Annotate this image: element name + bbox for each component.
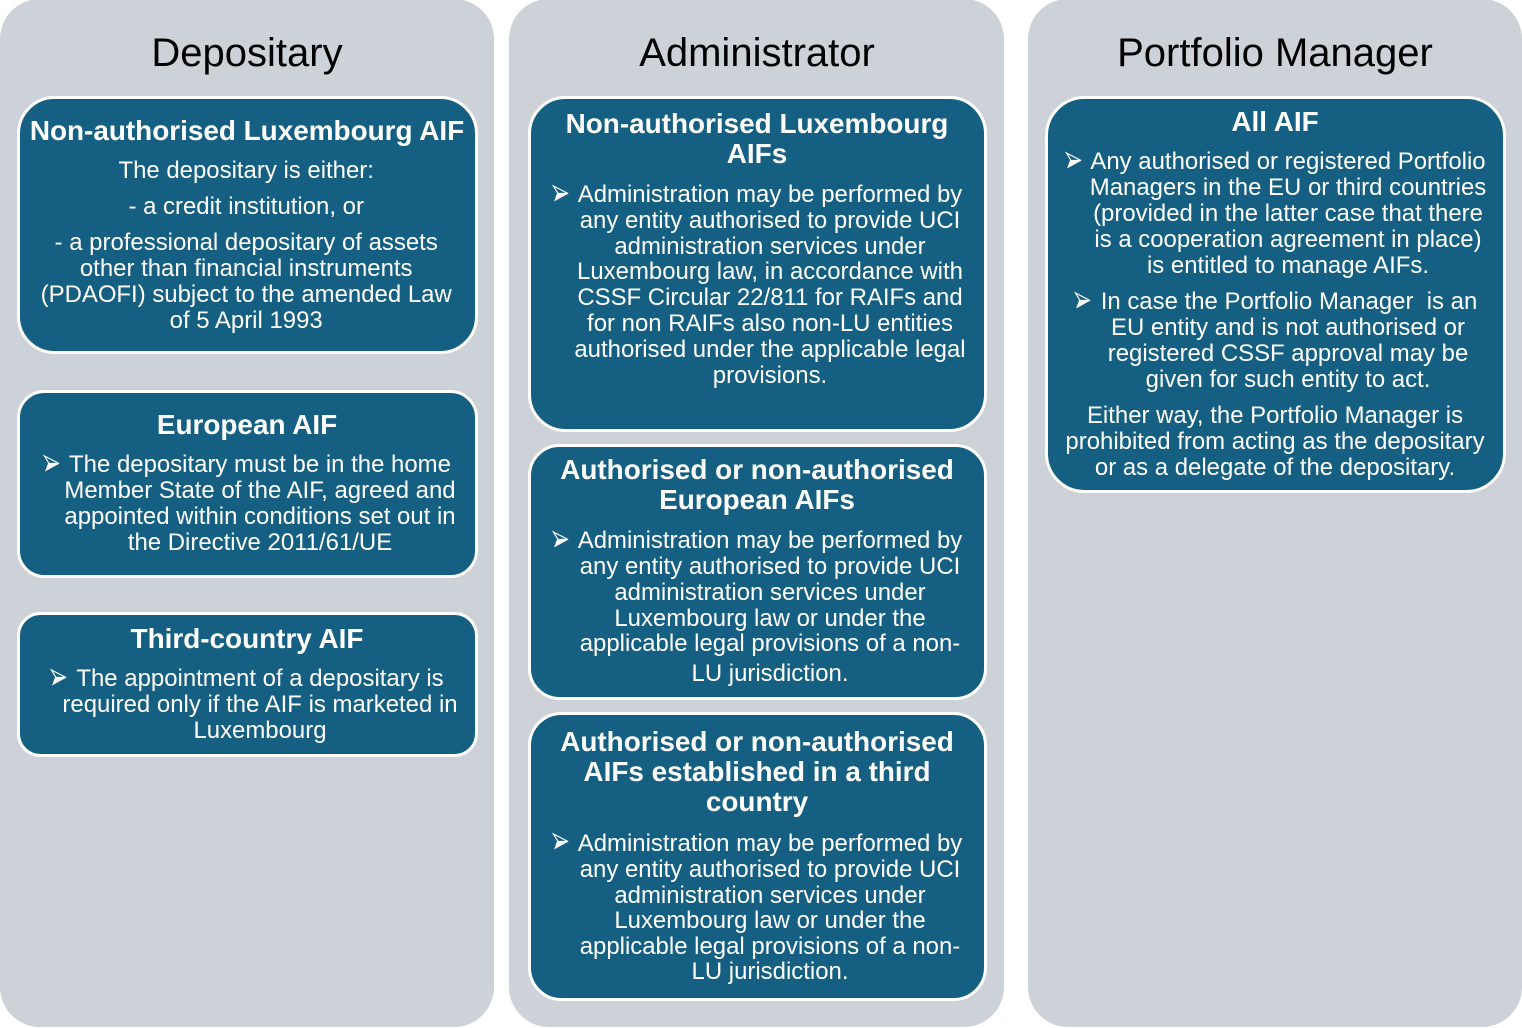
card: Non-authorised Luxembourg AIFs: provisions. — [713, 362, 827, 389]
card: Authorised or non-authorised AIFs established in a third country: administration services under — [614, 882, 926, 909]
card: Authorised or non-authorised European AIFs: Authorised or non-authorised — [560, 454, 954, 485]
icon: arrow bullet — [1066, 153, 1082, 168]
card: Non-authorised Luxembourg AIFs: Administration may be performed by — [578, 181, 962, 208]
card: All AIF: is a cooperation agreement in place) — [1094, 226, 1482, 253]
heading: Depositary: Depositary — [151, 31, 343, 75]
card: Non-authorised Luxembourg AIF: Non-authorised Luxembourg AIF — [30, 115, 464, 146]
card: Authorised or non-authorised European AIFs: European AIFs — [659, 484, 855, 515]
card: Authorised or non-authorised AIFs established in a third country: LU jurisdiction. — [692, 958, 848, 985]
card: Third-country AIF — [18, 614, 476, 756]
card: Authorised or non-authorised AIFs established in a third country: Administration may be performed by — [578, 830, 962, 857]
card: Non-authorised Luxembourg AIFs: AIFs — [727, 138, 787, 169]
card: All AIF: Any authorised or registered Portfolio — [1090, 148, 1486, 175]
card: Authorised or non-authorised European AIFs: any entity authorised to provide UCI — [580, 553, 960, 580]
card: Non-authorised Luxembourg AIF: The depositary is either: — [118, 157, 374, 184]
card: Non-authorised Luxembourg AIF: - a credit institution, or — [128, 193, 364, 220]
card: Third-country AIF: Luxembourg — [193, 717, 327, 744]
card: All AIF: or as a delegate of the depositary. — [1095, 454, 1455, 481]
card: Non-authorised Luxembourg AIFs: Luxembourg law, in accordance with — [577, 258, 963, 285]
heading: Portfolio Manager: Portfolio Manager — [1117, 31, 1433, 75]
icon: arrow bullet — [1076, 293, 1090, 308]
card: Non-authorised Luxembourg AIFs: Non-authorised Luxembourg — [566, 108, 948, 139]
card: All AIF: Managers in the EU or third countries — [1090, 174, 1486, 201]
card: Non-authorised Luxembourg AIF: (PDAOFI) subject to the amended Law — [41, 281, 452, 308]
card: Authorised or non-authorised AIFs established in a third country — [530, 714, 986, 1000]
card: Non-authorised Luxembourg AIFs: administration services under — [614, 233, 926, 260]
card: Non-authorised Luxembourg AIFs: any entity authorised to provide UCI — [580, 207, 960, 234]
card: Third-country AIF: The appointment of a depositary is — [76, 665, 444, 692]
card: Authorised or non-authorised European AIFs: LU jurisdiction. — [692, 660, 848, 687]
icon: arrow bullet — [554, 834, 568, 850]
card: Non-authorised Luxembourg AIFs: CSSF Circular 22/811 for RAIFs and — [577, 284, 963, 311]
card: Third-country AIF: required only if the AIF is marketed in — [62, 691, 458, 718]
card: European AIF: The depositary must be in the home — [69, 451, 451, 478]
card: All AIF: prohibited from acting as the depositary — [1065, 428, 1485, 455]
heading: Administrator: Administrator — [639, 31, 875, 75]
card: All AIF: Either way, the Portfolio Manager is — [1087, 402, 1463, 429]
panel: Administrator — [509, 0, 1004, 1027]
card: Non-authorised Luxembourg AIF: - a professional depositary of assets — [55, 229, 438, 256]
card: Non-authorised Luxembourg AIFs: authorised under the applicable legal — [574, 336, 966, 363]
card: Authorised or non-authorised European AIFs: applicable legal provisions of a non- — [580, 630, 960, 657]
card: All AIF: All AIF — [1231, 106, 1319, 137]
card: European AIF: the Directive 2011/61/UE — [128, 529, 392, 556]
card: Non-authorised Luxembourg AIF — [18, 98, 476, 352]
card: European AIF: appointed within conditions set out in — [64, 503, 456, 530]
card: Third-country AIF: Third-country AIF — [131, 623, 363, 654]
card: Non-authorised Luxembourg AIF: other than financial instruments — [80, 255, 413, 282]
card: Non-authorised Luxembourg AIF: of 5 April 1993 — [170, 307, 323, 334]
card: European AIF: Member State of the AIF, agreed and — [64, 477, 456, 504]
icon: arrow bullet — [44, 456, 60, 472]
card: Authorised or non-authorised AIFs established in a third country: applicable legal provisions of a non- — [580, 933, 960, 960]
card: Non-authorised Luxembourg AIFs: for non RAIFs also non-LU entities — [587, 310, 953, 337]
icon: arrow bullet — [554, 186, 568, 202]
icon: arrow bullet — [52, 670, 66, 686]
card: All AIF: is entitled to manage AIFs. — [1147, 252, 1429, 279]
card: Authorised or non-authorised AIFs established in a third country: AIFs established in a third — [583, 756, 931, 787]
card: All AIF: given for such entity to act. — [1146, 366, 1430, 393]
card: European AIF — [18, 392, 476, 576]
panel: Depositary — [0, 0, 494, 1027]
card: Authorised or non-authorised AIFs established in a third country: country — [706, 786, 809, 817]
card: All AIF: EU entity and is not authorised or — [1111, 314, 1465, 341]
card: All AIF: In case the Portfolio Manager is an — [1101, 288, 1477, 315]
card: Authorised or non-authorised AIFs established in a third country: any entity authorised to provide UCI — [580, 856, 960, 883]
card: Authorised or non-authorised European AIFs — [530, 446, 986, 698]
card: Authorised or non-authorised AIFs established in a third country: Authorised or non-authorised — [560, 726, 954, 757]
icon: arrow bullet — [554, 532, 568, 548]
card: All AIF — [1046, 98, 1504, 492]
panel: Portfolio Manager — [1028, 0, 1522, 1027]
card: European AIF: European AIF — [157, 409, 337, 440]
card: Authorised or non-authorised European AIFs: Luxembourg law or under the — [614, 605, 926, 632]
card: Authorised or non-authorised European AIFs: administration services under — [614, 579, 926, 606]
card: Authorised or non-authorised European AIFs: Administration may be performed by — [578, 527, 962, 554]
card: Authorised or non-authorised AIFs established in a third country: Luxembourg law or under the — [614, 907, 926, 934]
card: Non-authorised Luxembourg AIFs — [530, 98, 986, 430]
card: All AIF: (provided in the latter case that there — [1093, 200, 1483, 227]
card: All AIF: registered CSSF approval may be — [1108, 340, 1468, 367]
